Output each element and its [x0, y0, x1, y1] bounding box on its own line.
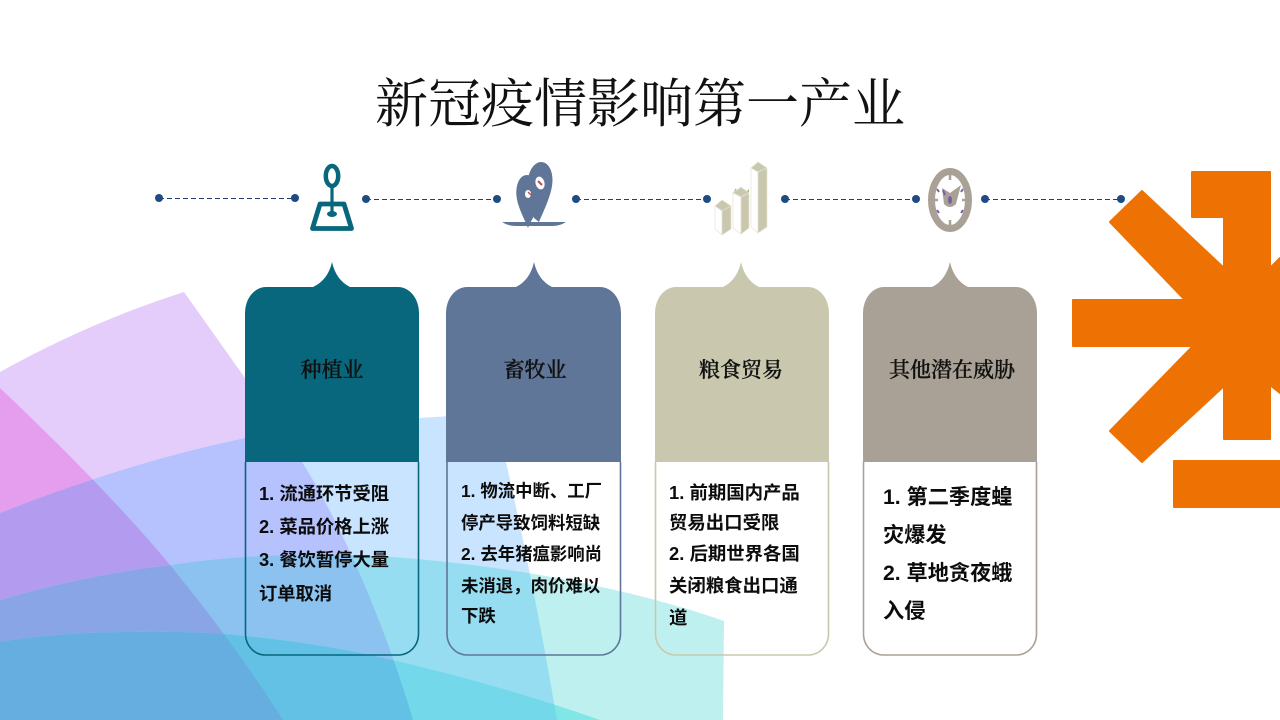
text: 粮食贸易 list: 贸易出口受限	[669, 512, 779, 533]
icon: 3D bar chart	[715, 162, 767, 235]
text: 畜牧业 list: 1. 物流中断、工厂	[461, 481, 602, 501]
icon: clock	[932, 172, 968, 228]
text: 其他潜在威胁 list: 灾爆发	[883, 523, 947, 547]
text: 粮食贸易 list: 道	[669, 607, 687, 628]
text: 畜牧业 list	[461, 481, 602, 626]
icon: joystick	[312, 166, 352, 228]
title: 新冠疫情影响第一产业	[375, 76, 905, 134]
panel: 其他潜在威胁	[863, 262, 1037, 655]
text: 种植业 list: 2. 菜品价格上涨	[259, 516, 389, 537]
text: 粮食贸易 list	[669, 482, 800, 628]
text: 粮食贸易 list: 1. 前期国内产品	[669, 482, 800, 503]
heading: 粮食贸易: 粮食贸易	[699, 358, 783, 382]
timeline: dotted connectors with end dots	[155, 194, 1125, 203]
text: 畜牧业 list: 2. 去年猪瘟影响尚	[461, 544, 602, 564]
text: 畜牧业 list: 停产导致饲料短缺	[461, 513, 601, 533]
panel: 畜牧业	[446, 262, 621, 655]
text: 其他潜在威胁 list: 入侵	[883, 599, 925, 623]
heading: 其他潜在威胁: 其他潜在威胁	[889, 358, 1016, 382]
text: 种植业 list: 3. 餐饮暂停大量	[259, 549, 389, 570]
heading: 畜牧业: 畜牧业	[504, 358, 566, 382]
background: overlapping coloured fan shapes	[0, 292, 724, 720]
text: 种植业 list: 订单取消	[259, 583, 332, 604]
text: 畜牧业 list: 下跌	[461, 606, 496, 626]
icon: map pins	[502, 162, 566, 228]
decoration: orange asterisk logo shape	[1073, 172, 1280, 507]
panel: 种植业	[245, 262, 419, 655]
text: 其他潜在威胁 list: 1. 第二季度蝗	[883, 485, 1012, 509]
panel: 粮食贸易	[655, 262, 829, 655]
text: 种植业 list	[259, 483, 389, 604]
text: 粮食贸易 list: 关闭粮食出口通	[669, 575, 798, 596]
heading: 种植业: 种植业	[300, 358, 364, 382]
text: 粮食贸易 list: 2. 后期世界各国	[669, 543, 800, 564]
text: 其他潜在威胁 list	[883, 485, 1012, 623]
text: 畜牧业 list: 未消退，肉价难以	[461, 576, 601, 596]
text: 其他潜在威胁 list: 2. 草地贪夜蛾	[883, 560, 1012, 585]
text: 种植业 list: 1. 流通环节受阻	[259, 483, 389, 504]
